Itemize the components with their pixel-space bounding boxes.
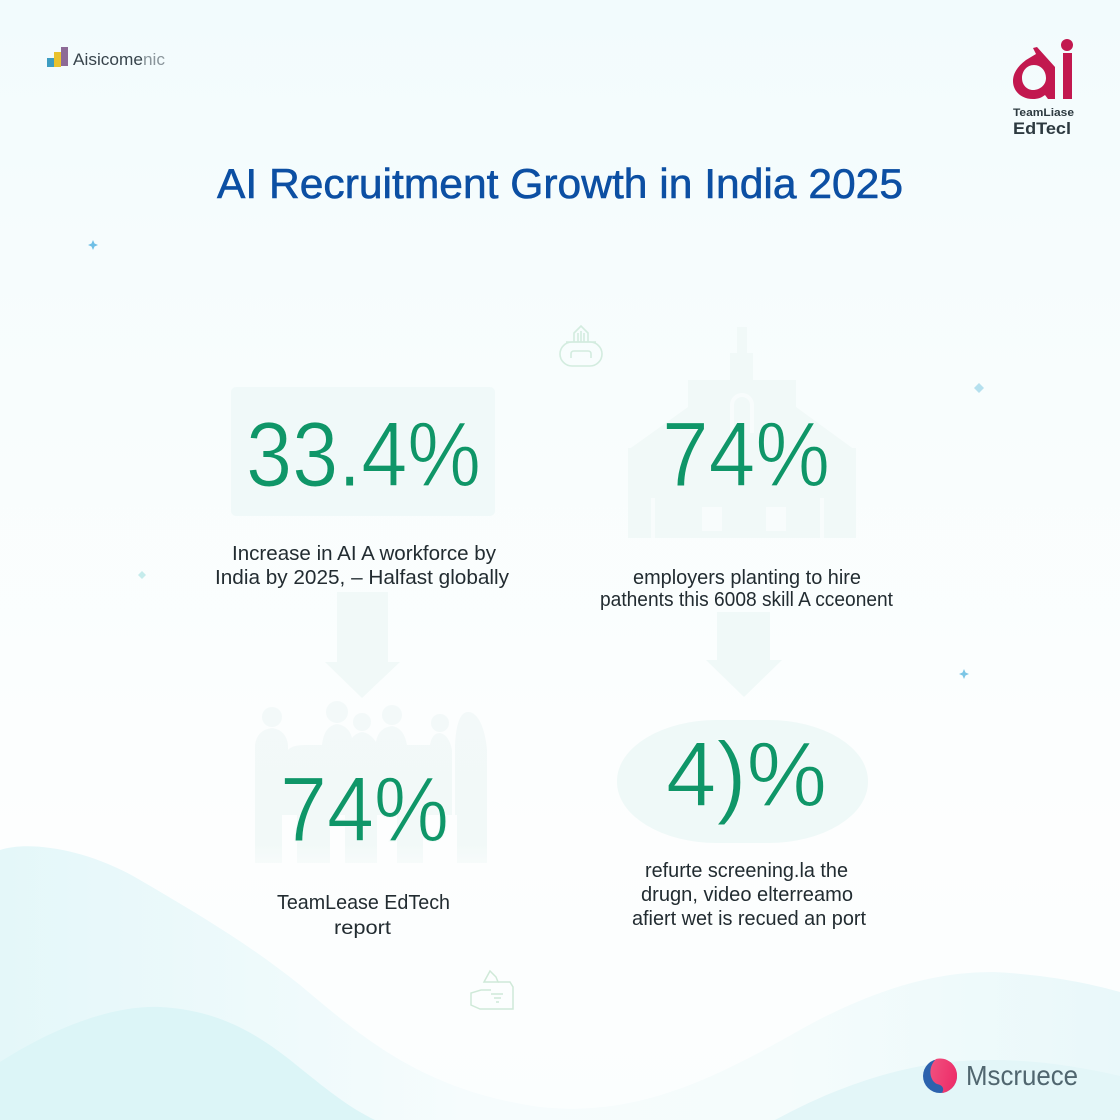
stat value: 74% — [662, 404, 830, 506]
stat description: pathents this 6008 skill A cceonent — [600, 589, 893, 611]
stat background ellipse — [617, 720, 868, 843]
panel: 74% employers stat — [600, 404, 893, 611]
icon: orb — [923, 1059, 957, 1093]
watermark: building windows — [651, 393, 824, 538]
icon: building outline — [560, 326, 602, 366]
logo: Aisicomenic: Aisicomenic — [73, 50, 166, 69]
watermark: building — [628, 327, 856, 538]
logo: Mscruece — [923, 1059, 1078, 1093]
stat description: India by 2025, – Halfast globally — [215, 567, 509, 589]
stat description: drugn, video elterreamo — [641, 884, 853, 906]
panel: 74% report stat — [277, 759, 450, 939]
stat description: TeamLease EdTech — [277, 892, 450, 914]
icon: colored bars — [47, 47, 68, 67]
stat description: employers planting to hire — [633, 567, 861, 589]
arrow: left down — [325, 592, 400, 698]
logo: TeamLease EdTech — [1013, 39, 1074, 138]
stat description: Increase in AI A workforce by — [232, 543, 496, 565]
logo: TeamLease EdTech: TeamLiase — [1013, 107, 1074, 119]
stat value: 33.4% — [246, 404, 481, 506]
sparkle: right lower — [959, 669, 969, 679]
icon: hand with cloud outline — [471, 971, 513, 1009]
stat description — [277, 892, 450, 939]
stat description: afiert wet is recued an port — [632, 908, 866, 930]
sparkle: left — [138, 571, 146, 579]
logo: Aisicomenic — [47, 47, 166, 69]
stat description — [600, 567, 893, 611]
arrow: right down — [706, 612, 782, 697]
stat value: 4)% — [666, 724, 827, 826]
logo: Mscruece: Mscruece — [966, 1060, 1078, 1091]
stat description — [632, 860, 866, 930]
logo: TeamLease EdTech: EdTecl — [1013, 119, 1071, 138]
icon: ai monogram — [1013, 39, 1073, 99]
bottom background waves — [0, 846, 1120, 1120]
sparkle: top left — [88, 240, 98, 250]
panel: 40% stat — [617, 720, 868, 930]
title: AI Recruitment Growth in India 2025 — [217, 160, 903, 207]
panel: 33.4% stat — [215, 387, 509, 589]
stat description: refurte screening.la the — [645, 860, 848, 882]
stat description: report — [334, 918, 392, 939]
stat description — [215, 543, 509, 589]
stat background card — [231, 387, 495, 516]
sparkle: right — [974, 383, 984, 393]
stat value: 74% — [280, 759, 449, 861]
watermark: people silhouettes — [255, 701, 487, 863]
